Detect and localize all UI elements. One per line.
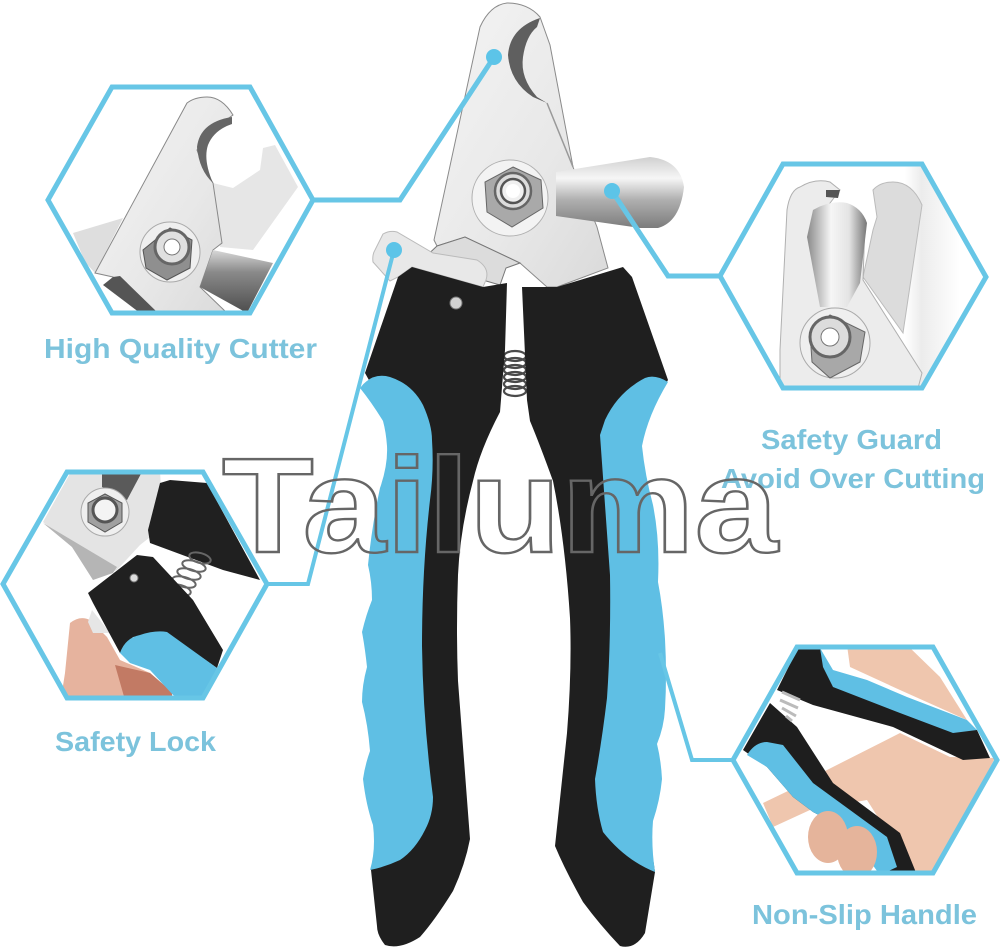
lower jaw <box>420 237 520 285</box>
callout line: safety guard <box>604 183 720 276</box>
left handle black <box>365 267 507 946</box>
panel: high quality cutter <box>48 87 313 313</box>
left handle blue grip <box>360 376 433 870</box>
label: non-slip handle: Non-Slip Handle <box>752 899 977 930</box>
label: avoid over cutting: Avoid Over Cutting <box>721 463 985 494</box>
panel: safety lock <box>3 470 267 705</box>
rivet <box>450 297 462 309</box>
hexagon frame <box>3 472 267 698</box>
label: safety guard: Safety Guard <box>761 424 942 455</box>
callout line: cutter <box>313 49 502 200</box>
safety lock tab <box>373 231 487 287</box>
hexagon photo: lock <box>43 470 260 705</box>
hexagon photo: guard <box>780 166 944 386</box>
main product: nail clipper <box>360 3 684 947</box>
pivot nut <box>485 167 543 227</box>
callout line: safety lock <box>267 242 402 584</box>
watermark: Tailuma <box>222 430 779 581</box>
pivot washer <box>472 160 548 236</box>
blade inner edge <box>547 103 573 167</box>
hexagon frame <box>733 647 997 873</box>
hexagon photo: cutter <box>73 97 298 313</box>
right handle black <box>522 267 668 947</box>
hexagon photo: handle in hand <box>743 645 995 878</box>
hexagon frame <box>720 164 986 388</box>
hexagon frame <box>48 87 313 313</box>
label: safety lock: Safety Lock <box>55 726 216 757</box>
panel: non-slip handle <box>733 645 997 878</box>
label: high quality cutter: High Quality Cutter <box>44 333 317 364</box>
cutter blade <box>434 3 608 287</box>
spring <box>504 351 526 396</box>
safety guard <box>556 157 684 228</box>
blade notch crescent <box>508 18 547 103</box>
callout line: non-slip handle <box>660 653 733 760</box>
panel: safety guard <box>720 164 986 392</box>
right handle blue grip <box>595 377 668 872</box>
